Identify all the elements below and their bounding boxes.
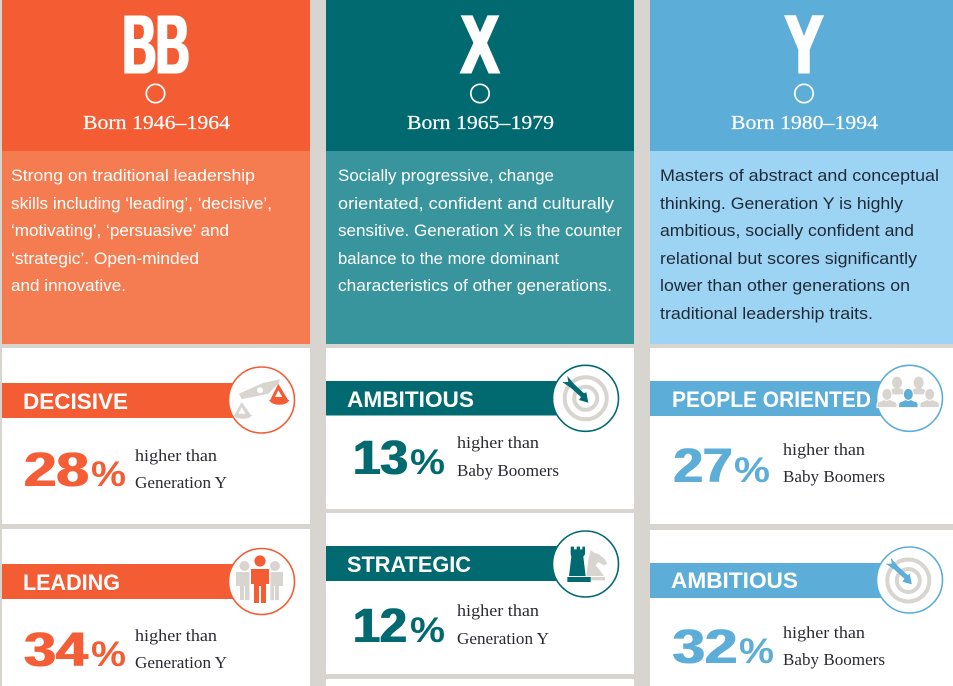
card: Ambitious 32%: % <box>739 632 774 671</box>
description: Generation X <box>326 151 634 344</box>
card: Ambitious 13%: % <box>410 443 445 482</box>
card: Ambitious 32%: higher than <box>783 623 866 642</box>
icon: group of people <box>876 365 942 431</box>
description: Baby Boomers: Strong on traditional leadership <box>11 166 255 185</box>
header: BB <box>2 0 310 151</box>
icon: target with arrow <box>876 547 942 613</box>
icon: scales <box>228 367 294 433</box>
description: Generation X: sensitive. Generation X is the counter <box>338 221 622 240</box>
card: People Oriented 27%: higher than <box>783 440 866 459</box>
card: Strategic 12%: STRATEGIC <box>347 552 471 577</box>
header: X: X <box>460 0 500 92</box>
description: Generation Y: thinking. Generation Y is highly <box>660 194 904 213</box>
card: Decisive 28%: higher than <box>135 446 218 465</box>
card: Strategic 12%: % <box>410 611 445 650</box>
card: People Oriented 27%: PEOPLE ORIENTED <box>672 387 871 412</box>
header: Y: Born 1980–1994 <box>731 112 878 134</box>
card: Ambitious 13% <box>326 348 634 509</box>
description: Generation Y: ambitious, socially confident and <box>660 221 914 240</box>
description: Generation X: orientated, confident and culturally <box>338 194 615 213</box>
description: Generation Y: relational but scores significantly <box>660 249 918 268</box>
panel: Baby Boomers column <box>2 0 310 686</box>
card: Ambitious 13%: AMBITIOUS <box>347 387 474 412</box>
description: Baby Boomers: skills including ‘leading’, ‘decisive’, <box>11 194 272 213</box>
card: Strategic 12%: Generation Y <box>457 629 549 648</box>
card: People Oriented 27%: Baby Boomers <box>783 467 885 486</box>
card: Ambitious 13%: 13 <box>353 432 408 485</box>
panel: Generation Y column <box>650 0 953 686</box>
card: Decisive 28%: % <box>91 455 126 494</box>
description: Generation Y: Masters of abstract and conceptual <box>660 166 939 185</box>
card: Strategic 12%: 12 <box>353 600 407 653</box>
description: Baby Boomers: ‘strategic’. Open-minded <box>11 249 199 268</box>
card: People Oriented 27%: % <box>734 451 770 490</box>
card: Ambitious 32% <box>650 530 953 686</box>
description: Baby Boomers <box>2 151 310 344</box>
description: Generation Y <box>650 151 953 344</box>
card: Decisive 28%: DECISIVE <box>23 389 128 414</box>
description: Generation Y: lower than other generations on <box>660 276 910 295</box>
card: Ambitious 13%: Baby Boomers <box>457 461 559 480</box>
description: Baby Boomers: ‘motivating’, ‘persuasive’ and <box>11 221 229 240</box>
header: X <box>326 0 634 151</box>
card: Ambitious 32%: Baby Boomers <box>783 650 885 669</box>
card: Leading 34%: % <box>91 635 126 674</box>
icon: target with arrow <box>552 365 618 431</box>
header: X: Born 1965–1979 <box>407 112 554 134</box>
card: Strategic 12% <box>326 513 634 674</box>
card: Leading 34% <box>2 529 310 686</box>
icon: leader figures <box>228 548 294 614</box>
description: Generation X: balance to the more dominant <box>338 249 559 268</box>
card: Leading 34%: higher than <box>135 626 218 645</box>
card: Leading 34%: LEADING <box>23 570 120 595</box>
card: Leading 34%: 34 <box>24 624 88 677</box>
header: BB: Born 1946–1964 <box>83 112 230 134</box>
card: next card, cropped <box>326 679 634 686</box>
card: Leading 34%: Generation Y <box>135 653 227 672</box>
card: Decisive 28%: 28 <box>24 444 89 497</box>
header: BB: BB <box>123 0 189 92</box>
panel: Generation X column <box>326 0 634 686</box>
card: People Oriented 27%: 27 <box>674 440 732 493</box>
card: Strategic 12%: higher than <box>457 601 540 620</box>
description: Generation X: characteristics of other generations. <box>338 276 612 295</box>
description: Generation X: Socially progressive, change <box>338 166 554 185</box>
description: Baby Boomers: and innovative. <box>11 276 126 295</box>
card: Decisive 28%: Generation Y <box>135 473 227 492</box>
card: Decisive 28% <box>2 348 310 524</box>
card: People Oriented 27% <box>650 348 953 524</box>
card: Ambitious 13%: higher than <box>457 433 540 452</box>
card: Ambitious 32%: 32 <box>673 621 737 674</box>
header: Y <box>650 0 953 151</box>
icon: chess rook and knight <box>552 531 618 597</box>
header: Y: Y <box>784 0 824 92</box>
card: Ambitious 32%: AMBITIOUS <box>671 568 798 593</box>
description: Generation Y: traditional leadership traits. <box>660 304 873 323</box>
